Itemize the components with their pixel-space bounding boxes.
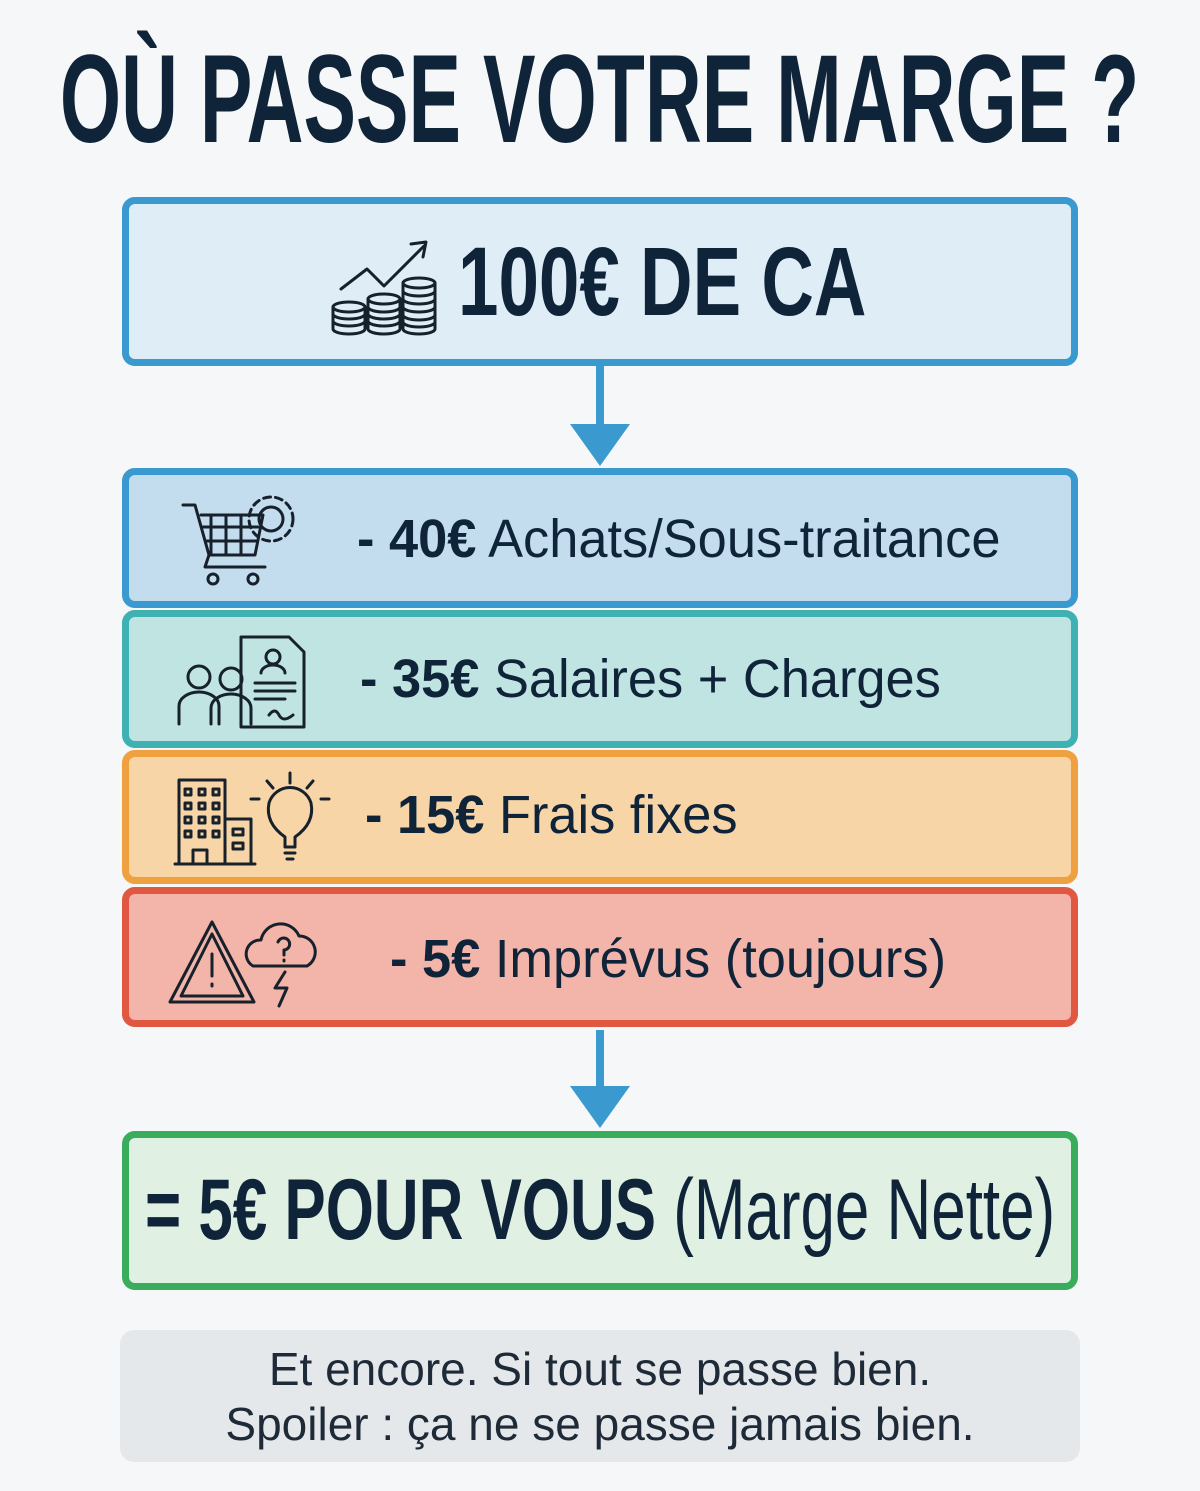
text: -15€ frais fixes: - 15€ Frais fixes — [365, 785, 738, 845]
icon: building and bulb — [174, 772, 330, 866]
panel: imprévus — [122, 887, 1078, 1027]
icon: people and document — [178, 636, 306, 728]
title: OÙ PASSE VOTRE MARGE ? — [60, 30, 1140, 169]
footer note: Et encore. Si tout se passe bien. — [269, 1343, 931, 1395]
text: -5€ imprévus: - 5€ Imprévus (toujours) — [390, 929, 946, 989]
text: -40€ achats: - 40€ Achats/Sous-traitance — [357, 509, 1000, 569]
footer note — [120, 1330, 1080, 1462]
panel: marge nette — [122, 1131, 1078, 1290]
panel: chiffre d'affaires — [122, 197, 1078, 366]
panel: salaires — [122, 610, 1078, 748]
panel: achats — [122, 468, 1078, 608]
arrow 2 — [570, 1030, 630, 1128]
icon: warning and storm — [168, 920, 317, 1008]
text: result: = 5€ POUR VOUS (Marge Nette) — [145, 1162, 1055, 1258]
icon: cart and gear — [182, 496, 294, 586]
panel: frais fixes — [122, 750, 1078, 884]
heading: 100€ de CA: 100€ DE CA — [458, 227, 866, 336]
footer note: Spoiler : ça ne se passe jamais bien. — [225, 1398, 975, 1450]
arrow 1 — [570, 366, 630, 466]
text: -35€ salaires: - 35€ Salaires + Charges — [360, 649, 941, 709]
icon: coins growth — [332, 240, 436, 336]
